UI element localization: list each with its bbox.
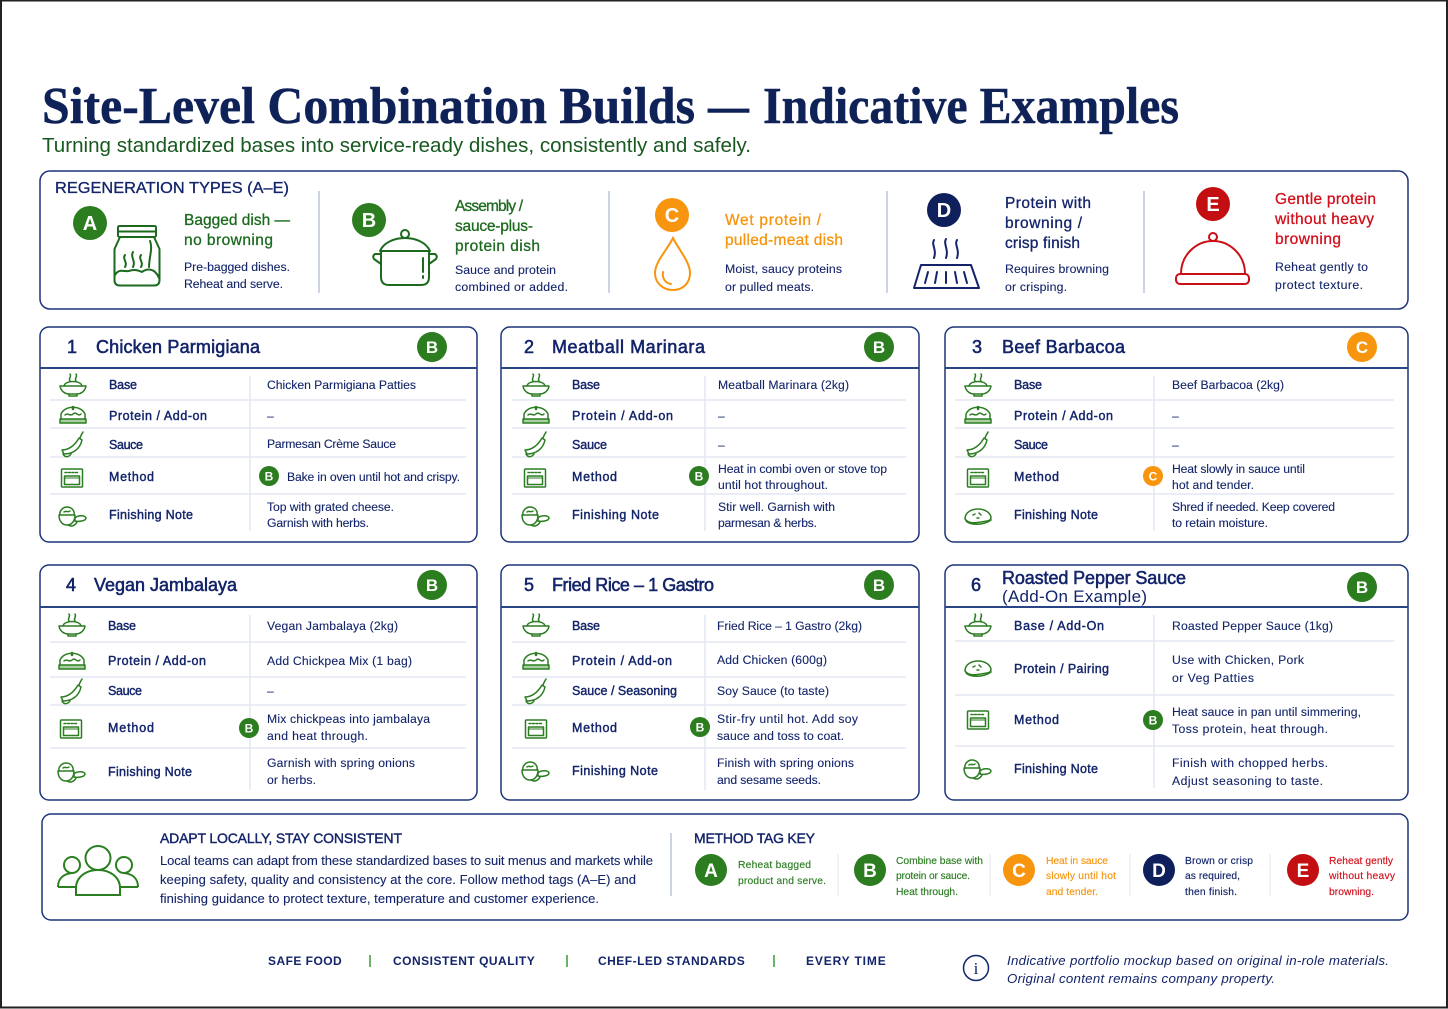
card 1 heading: 1 (67, 337, 77, 357)
row: protein: Protein / Add-on (109, 409, 207, 423)
key D: as required, (1185, 871, 1240, 882)
footer values strip: CONSISTENT QUALITY (393, 954, 536, 968)
row: method: Mix chickpeas into jambalaya (267, 712, 430, 726)
adapt locally text: Local teams can adapt from these standardized bases to suit menus and markets while (160, 853, 653, 868)
type C: wet protein: C (665, 205, 679, 227)
subtitle: Turning standardized bases into service-ready dishes, consistently and safely. (42, 134, 751, 157)
row: finishing note: Finishing Note (572, 764, 658, 778)
type C: wet protein: Moist, saucy proteins (725, 262, 842, 276)
row: protein: – (718, 409, 725, 423)
row: protein: Use with Chicken, Pork (1172, 653, 1305, 667)
type B: assembly: B (362, 210, 376, 232)
footer values strip: CHEF-LED STANDARDS (598, 954, 746, 968)
row: base: Fried Rice – 1 Gastro (2kg) (717, 619, 862, 633)
card 6 heading (971, 568, 1186, 606)
card 6 heading: (Add-On Example) (1002, 587, 1147, 606)
footer values strip: EVERY TIME (806, 954, 887, 968)
row: base: Base (1014, 378, 1042, 392)
key B: B (863, 861, 877, 882)
row: finishing note: Stir well. Garnish with (718, 500, 835, 514)
card 3: Beef Barbacoa: Beef Barbacoa (1002, 337, 1126, 357)
row: finishing note: Shred if needed. Keep covered (1172, 500, 1335, 514)
row: base: Base (572, 378, 600, 392)
type D: browning: crisp finish (1005, 235, 1080, 252)
type B: assembly: protein dish (455, 238, 540, 255)
card 6: Roasted Pepper Sauce (945, 565, 1408, 800)
row: protein (523, 653, 827, 669)
key C (1003, 854, 1116, 898)
row: protein: Protein / Add-on (572, 654, 672, 668)
row: protein: Protein / Add-on (1014, 409, 1113, 423)
row: base (965, 614, 1333, 636)
card 4 badge (417, 570, 447, 600)
row: protein: Protein / Pairing (1014, 662, 1109, 676)
row: method (62, 466, 460, 487)
row: method: Stir-fry until hot. Add soy (717, 712, 859, 726)
row: sauce: – (718, 438, 725, 452)
panel: adapt locally and method tag key (42, 814, 1408, 920)
key B (854, 854, 983, 898)
card 3 badge (1347, 332, 1377, 362)
key E: browning. (1329, 887, 1374, 898)
adapt locally text: ADAPT LOCALLY, STAY CONSISTENT (160, 830, 402, 846)
row: base: Base / Add-On (1014, 619, 1104, 633)
row: base (965, 374, 1284, 396)
row: protein (60, 407, 274, 423)
type D: browning (914, 193, 1109, 294)
key D: D (1152, 861, 1166, 882)
method tag key heading: METHOD TAG KEY (694, 830, 816, 846)
row: finishing note: Adjust seasoning to taste. (1172, 774, 1323, 788)
row: protein: Protein / Add-on (572, 409, 673, 423)
key E: Reheat gently (1329, 856, 1394, 867)
row: method: C (1149, 470, 1158, 484)
title: — (707, 78, 750, 135)
type B: assembly: Assembly / (455, 198, 524, 215)
type D: browning: browning / (1005, 215, 1083, 232)
row: sauce: – (1172, 438, 1179, 452)
row: method: B (1149, 714, 1158, 728)
title: Indicative Examples (763, 78, 1179, 135)
card 5: Fried Rice (501, 565, 919, 800)
card 1: Chicken Parmigiana (40, 327, 477, 542)
footer values strip: SAFE FOOD (268, 954, 343, 968)
heading: regeneration types: REGENERATION TYPES (A–E) (55, 180, 289, 197)
card 4 heading: 4 (66, 575, 76, 595)
card 3: Beef Barbacoa (945, 327, 1408, 542)
row: sauce: Sauce (1014, 438, 1048, 452)
row: base (59, 614, 398, 636)
disclaimer: Original content remains company property. (1007, 971, 1275, 986)
card 4: Vegan Jambalaya: Vegan Jambalaya (94, 575, 238, 595)
type A: bagged dish (73, 206, 290, 291)
adapt locally text (160, 830, 653, 906)
type C: wet protein: pulled-meat dish (725, 232, 843, 249)
key C: C (1012, 861, 1026, 882)
row: method: Method (1014, 713, 1059, 727)
row: finishing note: Finishing Note (572, 508, 659, 522)
type A: bagged dish: Bagged dish — (184, 212, 290, 229)
type E: gentle protein (1176, 187, 1376, 292)
key C: Heat in sauce (1046, 856, 1108, 867)
row: method (968, 462, 1305, 492)
card 2 heading: 2 (524, 337, 534, 357)
card 1: Chicken Parmigiana: Chicken Parmigiana (96, 337, 261, 357)
type E: gentle protein: E (1206, 194, 1220, 216)
type E: gentle protein: Gentle protein (1275, 191, 1376, 208)
row: method: and heat through. (267, 729, 368, 743)
type A: bagged dish: Reheat and serve. (184, 277, 283, 291)
row: base: Beef Barbacoa (2kg) (1172, 378, 1284, 392)
key A: Reheat bagged (738, 860, 811, 871)
row: protein (965, 653, 1305, 685)
row: finishing note (522, 500, 835, 530)
row: sauce: Soy Sauce (to taste) (717, 684, 829, 698)
row: method: B (265, 470, 274, 484)
row: method: until hot throughout. (718, 478, 828, 492)
card 6 badge (1347, 572, 1377, 602)
key E: E (1297, 861, 1309, 882)
row: protein: Protein / Add-on (108, 654, 206, 668)
key A (695, 854, 826, 887)
row: protein: – (267, 409, 274, 423)
row: method: Heat sauce in pan until simmering, (1172, 705, 1361, 719)
row: sauce (525, 432, 725, 457)
icon: team of people (58, 846, 138, 895)
type D: browning: Protein with (1005, 195, 1091, 212)
key D: Brown or crisp (1185, 856, 1253, 867)
type C: wet protein: or pulled meats. (725, 280, 814, 294)
card 6 heading: 6 (971, 575, 981, 595)
title: Site-Level Combination Builds (42, 78, 695, 135)
card 6 badge: B (1356, 578, 1368, 597)
row: base (523, 614, 862, 636)
row: finishing note: Garnish with spring onions (267, 756, 415, 770)
type C: wet protein (655, 198, 843, 294)
row: base: Meatball Marinara (2kg) (718, 378, 849, 392)
row: method: B (696, 720, 705, 734)
card 4: Vegan Jambalaya (40, 565, 477, 800)
row: base: Base (572, 619, 600, 633)
row: finishing note (58, 756, 415, 787)
row: method: Method (572, 470, 617, 484)
card 5 heading: 5 (524, 575, 534, 595)
type B: assembly: combined or added. (455, 280, 568, 294)
row: sauce (525, 679, 829, 704)
row: finishing note: Finish with chopped herbs. (1172, 756, 1328, 770)
row: finishing note (522, 756, 854, 787)
row: method (526, 712, 859, 743)
type B: assembly (352, 198, 568, 294)
row: sauce: Sauce (572, 438, 607, 452)
row: base (523, 374, 849, 396)
type D: browning: D (937, 200, 951, 222)
row: finishing note: Finishing Note (108, 765, 192, 779)
type B: assembly: sauce-plus- (455, 218, 533, 235)
row: protein: – (1172, 409, 1179, 423)
row: protein (59, 653, 412, 669)
row: method: Method (109, 470, 154, 484)
row: protein (965, 407, 1179, 423)
row: sauce: Sauce (109, 438, 143, 452)
disclaimer (1007, 953, 1389, 986)
card 2: Meatball Marinara: Meatball Marinara (552, 337, 706, 357)
row: method: Heat slowly in sauce until (1172, 462, 1305, 476)
row: finishing note (964, 756, 1328, 788)
row: finishing note: to retain moisture. (1172, 516, 1268, 530)
row: protein: Add Chicken (600g) (717, 653, 827, 667)
row: protein: Add Chickpea Mix (1 bag) (267, 654, 412, 668)
type A: bagged dish: A (83, 213, 97, 235)
type A: bagged dish: Pre-bagged dishes. (184, 260, 290, 274)
type E: gentle protein: Reheat gently to (1275, 260, 1368, 274)
row: base: Base (109, 378, 137, 392)
row: finishing note: Finishing Note (1014, 762, 1098, 776)
row: method: Method (1014, 470, 1059, 484)
card 4 badge: B (426, 576, 438, 595)
card 3 heading: 3 (972, 337, 982, 357)
row: method: Bake in oven until hot and crispy. (287, 470, 460, 484)
row: base: Base (108, 619, 136, 633)
row: method: B (245, 722, 254, 736)
key E: without heavy (1328, 871, 1396, 882)
panel: regeneration types (40, 171, 1408, 309)
footer values strip (268, 954, 887, 968)
card 2: Meatball Marinara (501, 327, 919, 542)
row: finishing note: Finishing Note (1014, 508, 1098, 522)
adapt locally text: keeping safety, quality and consistency at the core. Follow method tags (A–E) and (160, 872, 636, 887)
card 6 heading: Roasted Pepper Sauce (1002, 568, 1186, 588)
type D: browning: or crisping. (1005, 280, 1067, 294)
row: sauce: Parmesan Crème Sauce (267, 437, 396, 451)
row: method (60, 712, 430, 743)
key C: and tender. (1046, 887, 1098, 898)
card 2 badge (864, 332, 894, 362)
row: sauce (967, 432, 1179, 457)
type E: gentle protein: protect texture. (1275, 278, 1363, 292)
type E: gentle protein: browning (1275, 231, 1341, 248)
type A: bagged dish: no browning (184, 232, 273, 249)
row: method: B (695, 470, 704, 484)
card 2 badge: B (873, 338, 885, 357)
key B: Heat through. (896, 887, 958, 898)
row: base: Chicken Parmigiana Patties (267, 378, 416, 392)
row: base: Vegan Jambalaya (2kg) (267, 619, 398, 633)
adapt locally text: finishing guidance to protect texture, temperature and customer experience. (160, 891, 599, 906)
row: finishing note (59, 500, 394, 530)
row: sauce (61, 679, 274, 704)
row: method: Heat in combi oven or stove top (718, 462, 887, 476)
key A: product and serve. (738, 876, 826, 887)
key C: slowly until hot (1046, 871, 1116, 882)
row: sauce (62, 432, 396, 457)
type D: browning: Requires browning (1005, 262, 1109, 276)
type B: assembly: Sauce and protein (455, 263, 556, 277)
card 5 badge (864, 570, 894, 600)
row: base: Roasted Pepper Sauce (1kg) (1172, 619, 1333, 633)
type C: wet protein: Wet protein / (725, 212, 822, 229)
key B: protein or sauce. (896, 871, 970, 882)
type E: gentle protein: without heavy (1274, 211, 1374, 228)
icon: info: i (974, 959, 979, 978)
card 1 badge: B (426, 338, 438, 357)
row: method: sauce and toss to coat. (717, 729, 844, 743)
row: method (968, 705, 1361, 736)
row: finishing note: Finish with spring onions (717, 756, 854, 770)
row: sauce: – (267, 684, 274, 698)
key B: Combine base with (896, 856, 983, 867)
title (42, 78, 1179, 135)
row: method: Method (572, 721, 617, 735)
row: method (524, 462, 887, 492)
disclaimer: Indicative portfolio mockup based on original in-role materials. (1007, 953, 1389, 968)
key D: then finish. (1185, 887, 1237, 898)
row: method: Method (108, 721, 154, 735)
row: protein: or Veg Patties (1172, 671, 1254, 685)
row: finishing note (965, 500, 1335, 530)
key A: A (704, 861, 718, 882)
row: method: hot and tender. (1172, 478, 1254, 492)
row: finishing note: or herbs. (267, 773, 316, 787)
row: sauce: Sauce / Seasoning (572, 684, 677, 698)
row: finishing note: and sesame seeds. (717, 773, 821, 787)
card 5 badge: B (873, 576, 885, 595)
key D (1143, 854, 1253, 898)
row: finishing note: Top with grated cheese. (267, 500, 394, 514)
card 3 badge: C (1356, 338, 1368, 357)
row: finishing note: Garnish with herbs. (267, 516, 369, 530)
row: finishing note: Finishing Note (109, 508, 193, 522)
card 1 badge (417, 332, 447, 362)
row: sauce: Sauce (108, 684, 142, 698)
card 5: Fried Rice: Fried Rice – 1 Gastro (552, 575, 714, 595)
icon: info (964, 956, 988, 980)
key E (1287, 854, 1396, 898)
row: protein (523, 407, 725, 423)
row: base (60, 374, 416, 396)
row: method: Toss protein, heat through. (1172, 722, 1328, 736)
row: finishing note: parmesan & herbs. (718, 516, 817, 530)
